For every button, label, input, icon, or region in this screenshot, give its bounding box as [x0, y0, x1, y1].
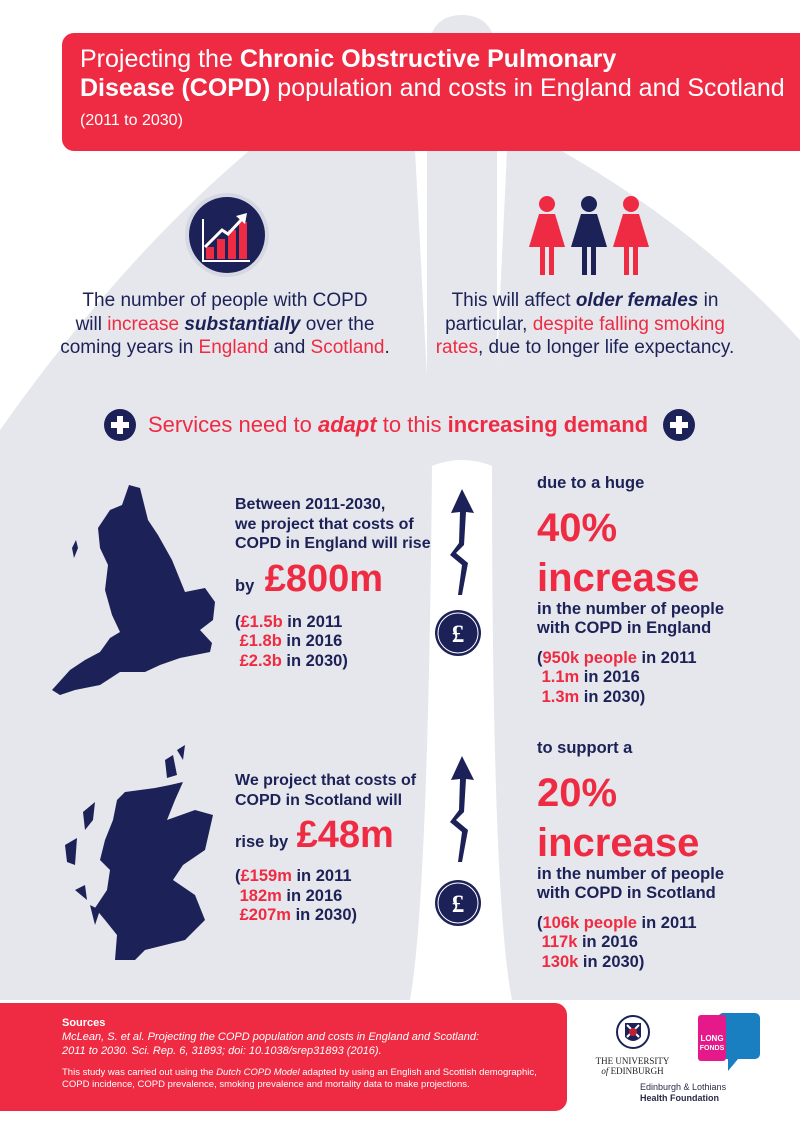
text: people increase: coming years in England and Scotland. — [60, 337, 390, 358]
services banner — [104, 409, 695, 441]
text: older females: rates, due to longer life expectancy. — [436, 337, 734, 358]
text: Scotland costs: (£159m in 2011 — [235, 867, 352, 885]
text: Scotland costs: COPD in Scotland will — [235, 792, 402, 808]
text: Scotland people increase: to support a — [537, 739, 632, 757]
text: older females: particular, despite falling smoking — [445, 314, 725, 334]
text: England costs: (£1.5b in 2011 — [235, 612, 342, 630]
text: Scotland people increase: 130k in 2030) — [542, 952, 644, 970]
text: England people increase: 40% — [537, 506, 617, 550]
logo: Long Fonds — [698, 1013, 760, 1071]
map: England — [52, 485, 215, 695]
text: Scotland people increase: in the number of people — [537, 864, 724, 882]
map: Scotland — [65, 745, 213, 960]
text: older females: This will affect older females in — [452, 290, 718, 311]
footer: sources: McLean, S. et al. Projecting the COPD population and costs in England and Scotland: — [62, 1031, 479, 1043]
arrow and pound icon: England — [435, 489, 481, 656]
header: (2011 to 2030) — [80, 112, 183, 129]
text: Scotland costs: £207m in 2030) — [240, 906, 357, 924]
footer: sources: 2011 to 2030. Sci. Rep. 6, 31893; doi: 10.1038/srep31893 (2016). — [62, 1045, 382, 1057]
text: Scotland people increase: increase — [537, 820, 699, 864]
services banner: Services need to adapt to this increasing demand — [148, 412, 648, 437]
logo: Edinburgh & Lothians Health Foundation: Health Foundation — [640, 1093, 719, 1103]
icon: growth chart — [185, 193, 269, 277]
header: Projecting the Chronic Obstructive Pulmonary — [80, 45, 616, 73]
header: Disease (COPD) population and costs in England and Scotland — [80, 74, 785, 102]
text: Scotland people increase — [537, 739, 724, 970]
text: England people increase: 1.3m in 2030) — [542, 688, 645, 706]
text: England costs: we project that costs of — [235, 516, 414, 532]
text: Scotland costs: We project that costs of — [235, 772, 416, 789]
text: Scotland costs: rise by £48m — [235, 814, 394, 856]
text: England costs: Between 2011-2030, — [235, 496, 385, 513]
text: England people increase: due to a huge — [537, 474, 644, 492]
text: England people increase — [537, 474, 724, 706]
text: England people increase: 1.1m in 2016 — [542, 668, 640, 686]
text: people increase: will increase substantially over the — [76, 314, 374, 334]
text: England people increase: with COPD in England — [537, 619, 711, 637]
footer: sources: This study was carried out using the Dutch COPD Model adapted by using an English and Scottish demographic, — [62, 1067, 537, 1078]
arrow and pound icon: Scotland — [435, 756, 481, 926]
logo: Edinburgh & Lothians Health Foundation: Edinburgh & Lothians — [640, 1082, 726, 1092]
text: England people increase: increase — [537, 556, 699, 600]
text: England people increase: in the number of people — [537, 600, 724, 618]
header — [62, 33, 800, 151]
text: England costs: £2.3b in 2030) — [240, 652, 348, 670]
logo: Edinburgh & Lothians Health Foundation — [640, 1082, 726, 1103]
logo: Long Fonds: FONDS — [700, 1045, 725, 1052]
text: Scotland costs: 182m in 2016 — [240, 886, 342, 904]
arrow and pound icon: England: £ — [452, 621, 464, 648]
text: England costs: by £800m — [235, 558, 383, 600]
logo: University of Edinburgh: of EDINBURGH — [601, 1066, 664, 1076]
text: older females — [436, 290, 734, 358]
text: Scotland costs — [235, 772, 416, 924]
logo: Long Fonds: LONG — [700, 1034, 724, 1043]
text: Scotland people increase: 117k in 2016 — [542, 933, 638, 951]
logo: University of Edinburgh — [596, 1015, 670, 1076]
text: Scotland people increase: (106k people in 2011 — [537, 914, 697, 932]
footer: sources: Sources — [62, 1017, 105, 1029]
footer: sources — [0, 1003, 567, 1111]
text: England people increase: (950k people in 2011 — [537, 648, 697, 666]
text: Scotland people increase: 20% — [537, 770, 617, 814]
text: people increase — [60, 290, 390, 358]
logo: University of Edinburgh: THE UNIVERSITY — [596, 1056, 669, 1066]
text: England costs — [235, 496, 431, 670]
text: people increase: The number of people with COPD — [82, 290, 368, 311]
text: Scotland people increase: with COPD in Scotland — [537, 884, 716, 902]
text: England costs: £1.8b in 2016 — [240, 632, 342, 650]
text: England costs: COPD in England will rise — [235, 535, 431, 552]
arrow and pound icon: Scotland: £ — [452, 891, 464, 918]
icon: three women — [529, 196, 649, 275]
footer: sources: COPD incidence, COPD prevalence, smoking prevalence and mortality data to make projections. — [62, 1079, 470, 1090]
